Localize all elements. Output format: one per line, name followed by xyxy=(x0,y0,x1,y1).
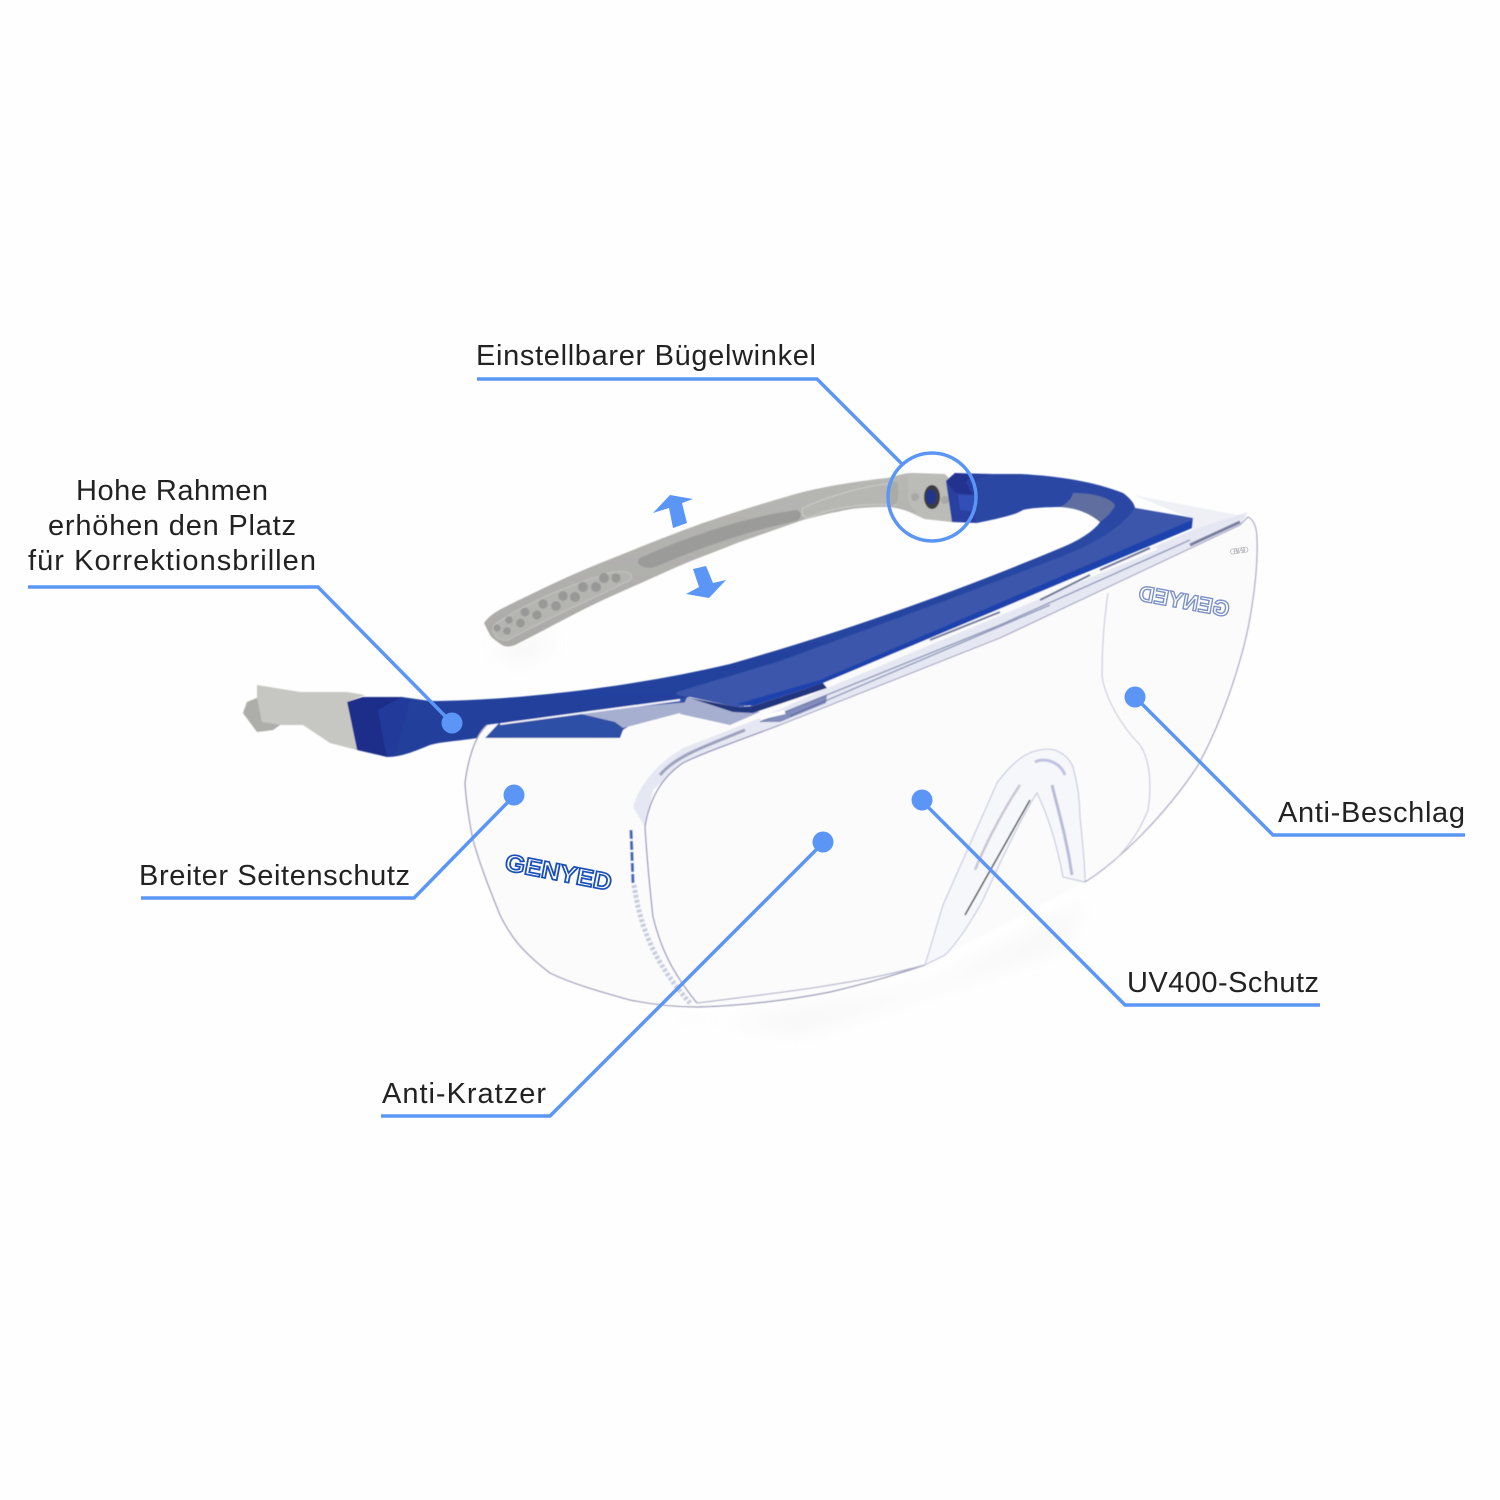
callout: Einstellbarer Bügelwinkel: Einstellbarer Bügelwinkel xyxy=(476,340,816,372)
hinge grey block xyxy=(908,474,952,522)
callout: Breiter Seitenschutz: Breiter Seitenschutz xyxy=(139,860,410,892)
soft ground shadow xyxy=(490,640,1090,1035)
arrow: up xyxy=(653,495,693,528)
callout: Anti-Kratzer: Anti-Kratzer xyxy=(382,1078,546,1110)
light recess xyxy=(802,483,898,518)
callout: Hohe Rahmen xyxy=(28,475,462,734)
callout: Hohe Rahmen: erhöhen den Platz xyxy=(48,510,296,542)
upper blue tab xyxy=(676,508,1193,707)
callout: Einstellbarer Bügelwinkel xyxy=(476,340,976,541)
callout: Anti-Beschlag: Anti-Beschlag xyxy=(1278,797,1465,829)
callout: Hohe Rahmen: Hohe Rahmen xyxy=(76,475,268,507)
logo: GENYED mirrored: GENYED xyxy=(1137,581,1232,622)
temple arm of frame xyxy=(972,474,1135,530)
tiny mark: GENYED xyxy=(1229,545,1249,557)
grip panel xyxy=(493,571,632,640)
side panel fold line xyxy=(1102,593,1150,860)
rear temple arm xyxy=(484,473,952,646)
callout: UV400-Schutz xyxy=(912,790,1320,1005)
callout: Hohe Rahmen: für Korrektionsbrillen xyxy=(28,545,316,577)
faint lens corner behind frame xyxy=(1133,495,1248,530)
callout: UV400-Schutz: UV400-Schutz xyxy=(1127,967,1319,999)
callout: Anti-Kratzer xyxy=(381,832,834,1116)
glasses product illustration xyxy=(243,473,1258,1035)
inner recess xyxy=(638,510,801,568)
lens outlines xyxy=(465,517,1257,1007)
lens body xyxy=(465,517,1258,1007)
grip holes xyxy=(494,573,621,635)
dark blue end piece xyxy=(347,697,402,757)
callout: Anti-Beschlag xyxy=(1124,686,1465,835)
arrow: down xyxy=(686,566,726,598)
blue frame reflected through lens xyxy=(485,695,690,738)
inner grey-blue crescent xyxy=(1060,493,1115,522)
nose bridge xyxy=(925,749,1085,965)
callout: Breiter Seitenschutz xyxy=(139,784,524,898)
lens rim reflections xyxy=(631,512,1248,1003)
main blue frame xyxy=(347,493,1193,757)
logo: GENYED side: GENYED xyxy=(503,849,614,896)
left temple tip xyxy=(243,685,365,750)
blue hinge blocks xyxy=(946,473,993,523)
blue print on edge xyxy=(631,830,633,883)
